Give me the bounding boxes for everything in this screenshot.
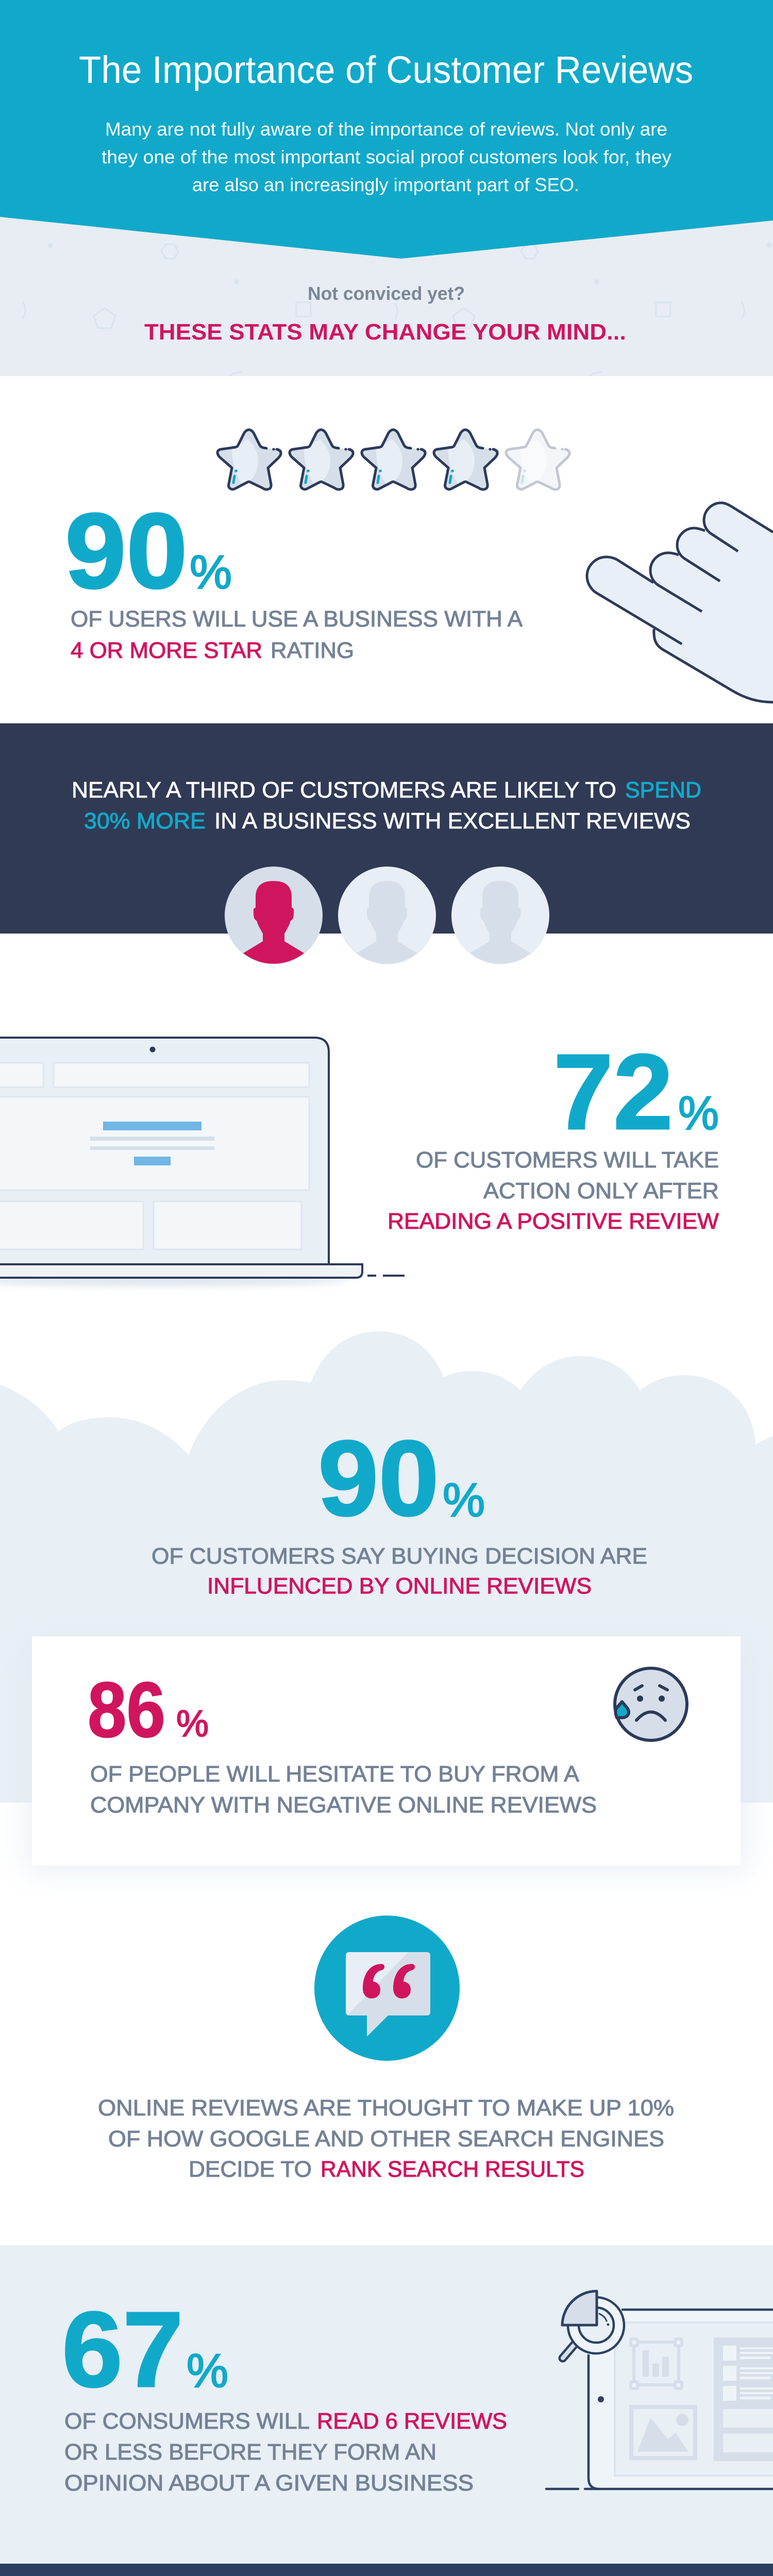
text: spend more stat: IN A BUSINESS WITH EXCELLENT REVIEWS — [214, 808, 691, 834]
stat: 90 percent: 90 — [65, 492, 188, 611]
text: hesitate stat: COMPANY WITH NEGATIVE ONLINE REVIEWS — [90, 1792, 597, 1818]
text: search ranking stat: OF HOW GOOGLE AND OTHER SEARCH ENGINES — [108, 2126, 664, 2151]
icon: tablet with magnifier — [546, 2291, 773, 2489]
text: search ranking stat: ONLINE REVIEWS ARE THOUGHT TO MAKE UP 10% — [98, 2095, 674, 2121]
text: star rating stat: OF USERS WILL USE A BUSINESS WITH A — [71, 606, 523, 632]
text: search ranking stat — [98, 2095, 674, 2182]
stat: 67 percent: 67 — [62, 2290, 183, 2410]
stat: 90 percent influenced: 90 — [318, 1419, 439, 1538]
text: influenced stat — [152, 1544, 647, 1599]
subheading: these stats: THESE STATS MAY CHANGE YOUR MIND... — [144, 319, 626, 345]
panel: cloud — [0, 1331, 773, 1803]
title: The Importance of Customer Reviews — [79, 48, 693, 91]
panel: spend 30 percent more — [0, 723, 773, 934]
text: positive review stat: READING A POSITIVE REVIEW — [388, 1209, 719, 1234]
text: star rating stat: 4 OR MORE STAR — [71, 638, 262, 663]
panel: not convinced background — [0, 206, 773, 376]
text: search ranking stat: DECIDE TO — [189, 2157, 312, 2182]
panel: do's and don'ts intro — [0, 2564, 773, 2576]
icon: laptop — [0, 1038, 405, 1286]
icon: star rating — [217, 430, 569, 489]
text: read 6 reviews stat: READ 6 REVIEWS — [317, 2409, 507, 2434]
text: read 6 reviews stat: OF CONSUMERS WILL — [64, 2409, 310, 2434]
text: star rating stat — [71, 606, 523, 663]
icon: three customers — [225, 867, 549, 964]
text: positive review stat — [388, 1147, 719, 1234]
text: spend more stat: 30% MORE — [84, 808, 206, 834]
text: read 6 reviews stat: OPINION ABOUT A GIVEN BUSINESS — [64, 2470, 474, 2496]
header band — [0, 0, 773, 259]
intro paragraph — [102, 118, 671, 195]
stat: 90 percent influenced: % — [443, 1474, 485, 1527]
intro paragraph: are also an increasingly important part of SEO. — [192, 174, 579, 195]
icon: sad face — [615, 1668, 687, 1740]
text: spend more stat: SPEND — [625, 777, 701, 803]
stat: 72 percent: % — [678, 1087, 719, 1140]
text: influenced stat: OF CUSTOMERS SAY BUYING DECISION ARE — [152, 1544, 647, 1569]
icon: pointing hand — [587, 503, 773, 702]
text: hesitate stat: OF PEOPLE WILL HESITATE TO BUY FROM A — [90, 1761, 580, 1787]
icon: quote bubble — [314, 1916, 460, 2061]
text: spend more stat — [72, 777, 701, 834]
stat: 86 percent: 86 — [88, 1666, 165, 1754]
stat: 67 percent: % — [187, 2345, 228, 2397]
intro paragraph: Many are not fully aware of the importance of reviews. Not only are — [105, 118, 667, 140]
text: spend more stat: NEARLY A THIRD OF CUSTOMERS ARE LIKELY TO — [72, 777, 616, 803]
intro paragraph: they one of the most important social proof customers look for, they — [102, 146, 671, 167]
panel: 67 percent — [0, 2245, 773, 2564]
stat: 86 percent: % — [176, 1703, 209, 1744]
panel: negative reviews card — [26, 1636, 747, 1873]
text: star rating stat: RATING — [271, 638, 354, 663]
subheading: not convinced yet: Not conviced yet? — [308, 283, 465, 304]
text: influenced stat: INFLUENCED BY ONLINE REVIEWS — [207, 1573, 592, 1599]
text: read 6 reviews stat: OR LESS BEFORE THEY FORM AN — [64, 2439, 436, 2465]
text: positive review stat: ACTION ONLY AFTER — [483, 1178, 719, 1204]
text: read 6 reviews stat — [64, 2409, 507, 2496]
text: hesitate stat — [90, 1761, 597, 1818]
text: positive review stat: OF CUSTOMERS WILL TAKE — [416, 1147, 719, 1173]
stat: 90 percent: % — [190, 546, 232, 599]
stat: 72 percent: 72 — [553, 1032, 673, 1152]
text: search ranking stat: RANK SEARCH RESULTS — [321, 2157, 584, 2182]
